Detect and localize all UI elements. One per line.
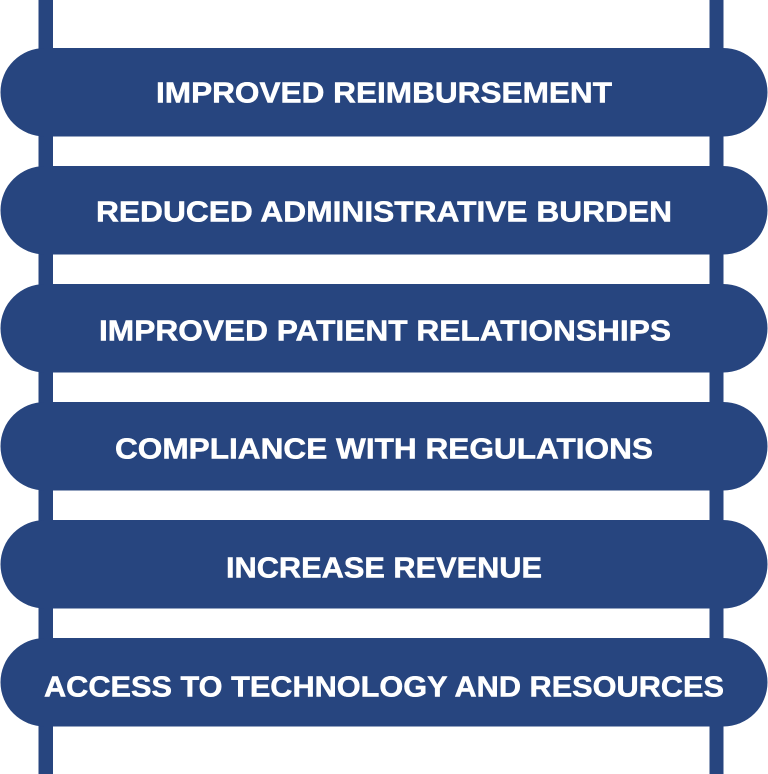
- rung: improved patient relationships: [0, 284, 768, 372]
- rung: improved patient relationships: IMPROVED PATIENT RELATIONSHIPS: [99, 316, 671, 348]
- left rail: [38, 0, 53, 774]
- rung: increase revenue: [0, 520, 768, 608]
- rung: improved reimbursement: [0, 48, 768, 136]
- rung: improved reimbursement: IMPROVED REIMBURSEMENT: [156, 78, 612, 110]
- rung: reduced administrative burden: [0, 166, 768, 254]
- rung: access to technology and resources: [0, 638, 768, 726]
- rung: increase revenue: INCREASE REVENUE: [226, 552, 542, 584]
- rung: access to technology and resources: ACCESS TO TECHNOLOGY AND RESOURCES: [44, 672, 724, 704]
- rung: compliance with regulations: COMPLIANCE WITH REGULATIONS: [115, 434, 653, 466]
- right rail: [710, 0, 724, 774]
- rung: compliance with regulations: [0, 402, 768, 490]
- rung: reduced administrative burden: REDUCED ADMINISTRATIVE BURDEN: [96, 196, 672, 228]
